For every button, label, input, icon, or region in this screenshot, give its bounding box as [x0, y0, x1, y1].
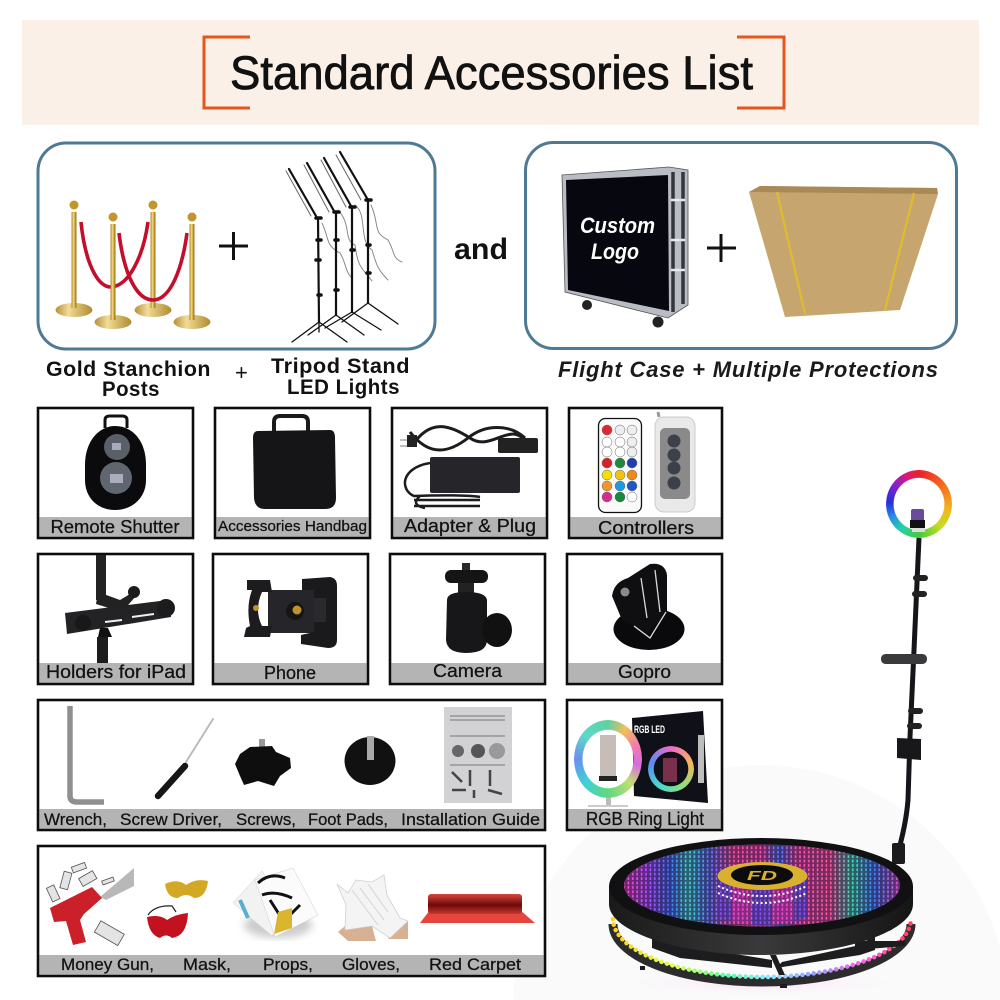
caption: gold stanchion posts: Posts [102, 378, 160, 401]
custom logo text: Custom [580, 213, 655, 238]
logo text: Logo [591, 239, 639, 264]
card: phone holder [213, 554, 368, 684]
icon: foot pad [344, 736, 396, 785]
telescoping pole [897, 538, 919, 856]
card: RGB ring light: RGB Ring Light [586, 808, 704, 829]
card: adapter and plug: Adapter & Plug [404, 515, 536, 536]
gold stanchion posts [56, 200, 210, 329]
plus [219, 232, 248, 260]
icon: white gloves [337, 875, 408, 941]
prop labels: Gloves, [342, 955, 400, 974]
cardboard box [749, 186, 938, 317]
icon: wrench [70, 706, 104, 802]
icon: installation guide [444, 707, 512, 803]
pole mount [892, 843, 905, 864]
card: accessories handbag: Accessories Handbag [218, 518, 367, 535]
LED ring base [613, 919, 911, 982]
clamp box [897, 738, 921, 760]
icon: screw knob [235, 739, 291, 786]
card: remote shutter [38, 408, 193, 538]
panel: flight case and box [526, 142, 956, 348]
tool labels: Wrench, [44, 810, 107, 829]
icon: gopro mount [612, 564, 684, 650]
icon: money gun [46, 862, 134, 946]
tool labels [44, 810, 540, 829]
prop labels: Money Gun, [61, 955, 154, 974]
icon: tablet holder [65, 555, 175, 663]
icon: ring light [574, 720, 642, 806]
floor glow behind stand [513, 765, 1000, 1000]
icon: remote shutter [85, 416, 146, 510]
card: gopro mount [567, 554, 722, 684]
prop labels: Props, [263, 955, 313, 974]
icon: handbag [253, 416, 336, 509]
card: small tools [38, 700, 545, 830]
icon: color remote [598, 418, 642, 512]
icon: screwdriver [158, 719, 213, 796]
right orange bracket [737, 37, 784, 108]
caption: gold stanchion posts [46, 358, 211, 401]
header band [22, 20, 979, 125]
icon: power adapter [400, 427, 538, 508]
pink glow under base [597, 967, 927, 999]
label: and: and [454, 233, 508, 266]
card: controllers: Controllers [598, 517, 694, 538]
plus [707, 234, 736, 262]
left orange bracket [204, 37, 250, 108]
center cylinder: FD [747, 868, 778, 883]
panel: stanchions and LED lights [38, 143, 435, 349]
card: party props [38, 846, 545, 976]
card: controllers [569, 408, 722, 538]
card: gopro mount: Gopro [618, 661, 671, 682]
icon: phone holder [244, 577, 337, 648]
card: phone holder: Phone [264, 662, 316, 683]
tool labels: Screws, [236, 810, 296, 829]
prop labels [61, 955, 521, 974]
center cylinder [717, 862, 808, 926]
card: adapter and plug [392, 408, 547, 538]
photo booth stand [597, 470, 952, 999]
icon: wireless fob [655, 412, 695, 512]
icon: masks [147, 880, 208, 938]
caption: tripod stand LED lights [271, 355, 410, 399]
ring light [886, 470, 952, 538]
card: camera mount: Camera [433, 660, 503, 681]
flight case [562, 167, 688, 328]
icon: red carpet [420, 894, 535, 923]
infinity mirror [624, 844, 900, 926]
tripod LED lights [286, 152, 402, 342]
caption: plus: + [235, 360, 248, 385]
icon: ring light box [632, 711, 708, 803]
turntable rim [609, 838, 913, 955]
card: remote shutter: Remote Shutter [50, 516, 180, 537]
caption: tripod stand LED lights: LED Lights [287, 376, 400, 399]
caption: gold stanchion posts: Gold Stanchion [46, 358, 211, 381]
caption: flight case and protections: Flight Case + Multiple Protections [558, 357, 938, 382]
icon: ball head [445, 563, 512, 653]
icon: props booklets [233, 868, 318, 938]
prop labels: Mask, [183, 955, 231, 974]
phone grip bar [881, 654, 927, 664]
pole joints [910, 578, 925, 726]
logo badge [731, 865, 793, 885]
phone on ring [910, 509, 925, 532]
card: holders for iPad: Holders for iPad [46, 661, 186, 682]
card: RGB ring light [567, 700, 722, 830]
card: camera mount [390, 554, 545, 684]
title: Standard Accessories List [230, 46, 753, 99]
caption: tripod stand LED lights: Tripod Stand [271, 355, 410, 378]
tool labels: Foot Pads, [308, 810, 388, 829]
card: accessories handbag [215, 408, 370, 538]
icon: ring light box: RGB LED [634, 724, 665, 736]
tool labels: Installation Guide [401, 810, 540, 829]
legs [640, 935, 905, 988]
card: holders for iPad [38, 554, 193, 684]
prop labels: Red Carpet [429, 955, 521, 974]
tool labels: Screw Driver, [120, 810, 222, 829]
